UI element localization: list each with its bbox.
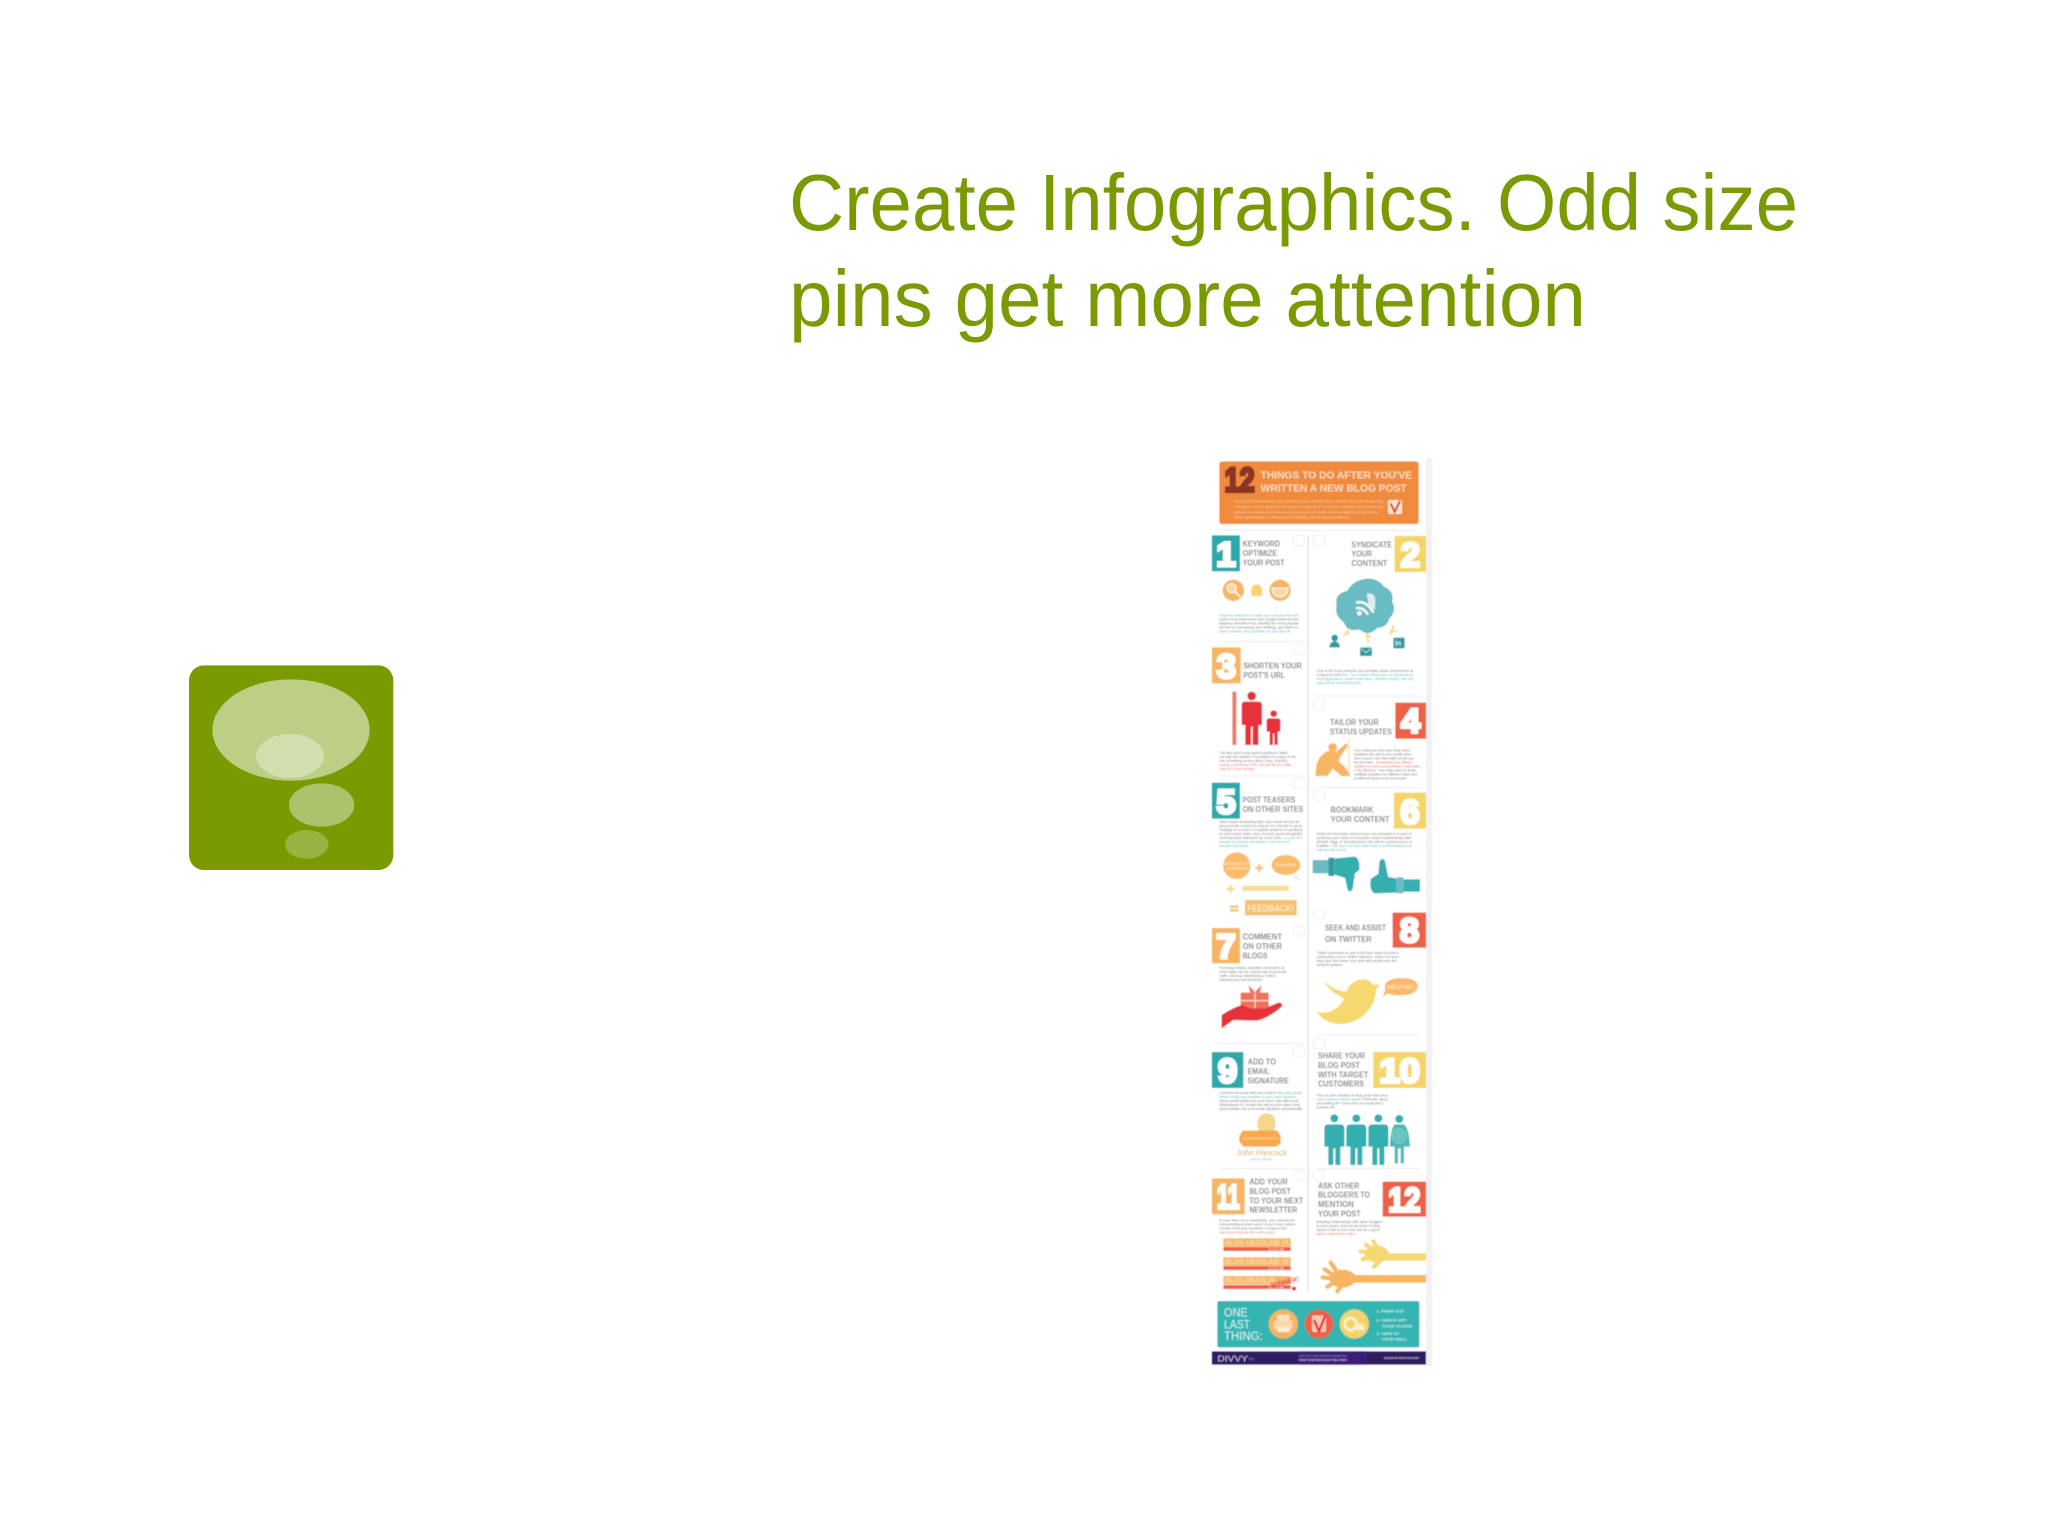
step 4: multiple updates for different days and: [1354, 772, 1417, 776]
icon: printer: [1269, 1309, 1298, 1339]
step 8: ON TWITTER: [1325, 935, 1372, 944]
diagram: teaser formula: THOUGHT: [1275, 863, 1297, 868]
step 7: 7: [1216, 928, 1236, 966]
step 9: ADD TO: [1248, 1058, 1276, 1067]
step 4: updates for each social network could make: [1354, 764, 1420, 768]
step 5: people to provide feedback in the form of: [1219, 840, 1290, 844]
step 10: BLOG POST: [1318, 1061, 1360, 1070]
step 11: 11: [1217, 1179, 1240, 1217]
illustration: newsletter headlines: BLOG HEADLINE #2: [1225, 1259, 1289, 1266]
step 9: 9: [1218, 1053, 1237, 1091]
step 12: [1314, 1171, 1426, 1291]
step 2: SYNDICATE: [1351, 540, 1393, 549]
step 9: Many email platforms now have http after post: [1219, 1099, 1300, 1103]
step 4: headline into all of your social sites: [1354, 752, 1411, 756]
step 6: pushing your content to popular social bookmarking sites: [1317, 836, 1412, 840]
step 2: feed. The content allows you to syndicate to: [1341, 673, 1413, 677]
step 8: community of your Twitter followers. Search for your: [1317, 955, 1399, 959]
step 12: way to extend your reach.: [1317, 1232, 1357, 1236]
panel: steps 3 to 6: having a shortened URL can see all your stats: [1219, 763, 1291, 767]
step 10: current customers will find valuable.: [1317, 1098, 1362, 1102]
step 10: What are: [1363, 1098, 1388, 1102]
step 5: 5: [1216, 783, 1236, 821]
header banner: Your post is published, and you think your work is done. But it's only just beginning,: [1234, 500, 1384, 504]
step 10: 10: [1379, 1053, 1420, 1091]
step 7: ON OTHER: [1243, 942, 1282, 951]
diagram: teaser formula: INTERESTING: [1223, 861, 1250, 866]
step 4: STATUS UPDATES: [1330, 727, 1393, 736]
step 10: WITH TARGET: [1318, 1070, 1368, 1079]
step 1: [1212, 535, 1305, 633]
step 6: [1313, 790, 1426, 893]
step 7: other blogs can be a great way to generate: [1219, 970, 1287, 974]
illustration: crouching figure: [1315, 738, 1351, 776]
step 8: asking for guidance.: [1317, 963, 1343, 967]
diagram: teaser formula: FEEDBACK!: [1247, 903, 1294, 913]
infographic: 12 things to do after writing a blog post: [1212, 458, 1432, 1366]
step 11: use your blog as the next point.: [1219, 1230, 1275, 1234]
step 8: blog topic and share your post with people who are: [1317, 959, 1397, 963]
step 5: Postings on a niche or a targeted audience or questions: [1219, 828, 1303, 832]
illustration: newsletter headlines: [1223, 1238, 1300, 1291]
step 7: BLOGS: [1243, 951, 1268, 960]
illustration: stamp and signature: [1235, 1113, 1288, 1162]
step 8: Twitter promotion is one of the best ways to build a: [1317, 951, 1399, 955]
step 1: keyword selection tool, identify the most popular: [1219, 621, 1299, 625]
illustration: twitter bird with speech bubble: HELP ME!: [1387, 985, 1414, 991]
step 3 heading: POST'S URL: [1243, 671, 1285, 680]
step 1: Keyword research is crucial, you must put the main: [1219, 613, 1299, 617]
step 11: If your time on a newsletter, you should be: [1219, 1218, 1295, 1222]
step 12: 12: [1388, 1181, 1420, 1219]
step 4: the most clicks.: [1354, 760, 1374, 764]
title: [789, 158, 1798, 343]
step 5: you promote content so long as it is relevant or good.: [1219, 824, 1303, 828]
step 12: ASK OTHER: [1318, 1181, 1360, 1190]
panel: steps 3 to 6: URL shortening services (Bit.ly, Ow.ly, TinyURL),: [1219, 759, 1289, 763]
illustration: gift in hand: [1222, 987, 1282, 1028]
step 11: BLOG POST: [1249, 1187, 1291, 1196]
step 11: NEWSLETTER: [1249, 1206, 1298, 1215]
step 6: make them like you too.: [1317, 848, 1347, 852]
step 9: post headline into your email signature automatically.: [1219, 1107, 1303, 1111]
step 6: YOUR CONTENT: [1331, 815, 1389, 824]
icon: checkmark: [1305, 1310, 1333, 1338]
header banner: WRITTEN A NEW BLOG POST: [1261, 484, 1407, 495]
illustration: newsletter headlines: BLOG HEADLIN: [1225, 1278, 1275, 1285]
step 2: apps using something else.: [1317, 681, 1362, 685]
step 1: YOUR POST: [1243, 558, 1285, 567]
step 5: ON OTHER SITES: [1243, 805, 1304, 814]
panel: one last thing: 3. TAPE TO: [1377, 1331, 1399, 1336]
step 2: feed aggregators, social media sites, LinkedIn Groups, and any: [1317, 677, 1413, 681]
step 8 number box top: [1393, 913, 1426, 936]
step 12: BLOGGERS TO: [1318, 1191, 1370, 1200]
title: Create Infographics. Odd size: [789, 158, 1798, 247]
step 9: SIGNATURE: [1248, 1076, 1290, 1085]
diagram: teaser formula: QUESTION: [1226, 866, 1247, 871]
step 7: Pursuing helpful, valuable comments on: [1219, 966, 1285, 970]
panel: one last thing: 1. PRINT OUT: [1377, 1309, 1405, 1314]
step 5: commentary followed by your URL.: [1219, 836, 1283, 840]
step 5: Look for: [1283, 836, 1304, 840]
step 1: KEYWORD: [1243, 540, 1280, 549]
icon: tape: [1340, 1309, 1369, 1339]
panel: header and steps 1 to 3: [1212, 461, 1426, 686]
step 12: about or link to your post can be a good: [1317, 1228, 1379, 1232]
step 8 heading top: SEEK AND ASSIST: [1325, 923, 1386, 932]
icon: thought bubble: [189, 665, 393, 870]
panel: steps 3 to 6: [1212, 692, 1426, 936]
step 2: YOUR: [1351, 550, 1372, 559]
step 1: OPTIMIZE: [1243, 549, 1278, 558]
step 8: [1317, 912, 1426, 1024]
step 5: Most social networking sites and online forums let: [1219, 820, 1300, 824]
step 12: Building relationships with other bloggers: [1317, 1220, 1383, 1224]
step 5: to your forum links, then include some thoughtful: [1219, 832, 1303, 836]
illustration: newsletter headlines: CLICK ME: [1268, 1285, 1285, 1289]
footer bar: DIVVYHQ IS YOUR CONTENT PLANNING TOOL: [1299, 1355, 1348, 1358]
illustration: newsletter headlines: CLICK ME: [1268, 1266, 1285, 1270]
step 11: incorporating at least some of your blog content.: [1219, 1222, 1296, 1226]
panel: one last thing: 2. CHECK OFF: [1377, 1318, 1407, 1323]
step 5: [1212, 779, 1304, 915]
step 6: traffic.: [1317, 844, 1331, 848]
step 9: feature along your headline to your email signature.: [1219, 1095, 1297, 1099]
step 4: a big difference.: [1354, 768, 1377, 772]
illustration: ruler and people: [1232, 692, 1280, 745]
panel: steps 3 to 6: but with the addition of analytics on many of the: [1219, 755, 1296, 759]
step 6: While the technique doesn't have the transparent it used to: [1317, 832, 1412, 836]
step 11: TO YOUR NEXT: [1249, 1196, 1303, 1205]
step 11: Include a few post headlines or teasers and: [1219, 1226, 1287, 1230]
step 6: (Reddit, Digg, or StumbleUpon) can still be a great source of: [1317, 840, 1413, 844]
step 6: 6: [1400, 793, 1420, 831]
step 9: EMAIL: [1248, 1067, 1270, 1076]
step 1: terms for phrasing and writing, go back to: [1219, 625, 1298, 629]
step 10: [1314, 1038, 1426, 1165]
panel: steps 11, 12 and closing: [1212, 1171, 1426, 1365]
step 2: [1314, 535, 1426, 685]
step 2: 2: [1401, 537, 1420, 575]
step 10: CUSTOMERS: [1318, 1080, 1365, 1089]
step 4: at different times to be successful.: [1354, 776, 1407, 780]
step 7: [1212, 927, 1304, 1028]
illustration: thumbs down and up: [1313, 858, 1420, 893]
step 3 heading: 3: [1217, 648, 1236, 686]
step 4: and a dozen, and that might not get you: [1354, 756, 1414, 760]
illustration: newsletter headlines: CLICK ME: [1268, 1247, 1285, 1251]
step 4: 4: [1401, 703, 1421, 741]
step 11: [1212, 1171, 1304, 1291]
panel: one last thing: ONE: [1224, 1306, 1248, 1320]
panel: steps 3 to 6: This step used to only apply to posting on Twitter,: [1219, 751, 1289, 755]
step 9: [1212, 1046, 1304, 1162]
footer bar: HQ: [1249, 1357, 1254, 1361]
step 3 heading: [1212, 645, 1304, 686]
header banner: publish and make sure that every post gets the traffic and the attention it deserves,: [1234, 510, 1379, 514]
step 9: last post: [1283, 1091, 1303, 1095]
panel: steps 3 to 6: now at a mere bitmap.: [1219, 767, 1255, 771]
step 6: BOOKMARK: [1331, 806, 1374, 815]
header banner: a blog is only as good as the way you spread it. Use this checklist every time you: [1234, 505, 1384, 509]
header banner: 12: [1225, 462, 1255, 500]
step 10: You've just created a blog post that your: [1317, 1094, 1389, 1098]
step 4: You may want to write: [1379, 768, 1416, 772]
step 12: MENTION: [1318, 1200, 1354, 1209]
illustration: social cloud: [1329, 579, 1405, 656]
step 5: POST TEASERS: [1243, 796, 1296, 805]
step 8: 8: [1400, 912, 1419, 950]
footer bar: START YOUR FREE 30-DAY TRIAL TODAY: [1299, 1358, 1348, 1362]
step 5: relevant discussion.: [1219, 844, 1249, 848]
illustration: social cloud: in: [1395, 641, 1401, 648]
icons: search, bell, bowl: [1223, 580, 1291, 601]
step 4: TAILOR YOUR: [1330, 718, 1379, 727]
step 12: in your space and asking them to blog: [1317, 1224, 1380, 1228]
panel: one last thing: [1217, 1301, 1419, 1347]
step 4: Tweaking your status: [1375, 760, 1412, 764]
illustration: stamp and signature: John Hancock: [1235, 1148, 1288, 1157]
illustration: reaching hands: [1323, 1241, 1426, 1291]
step 2: a blog is its RSS: [1317, 673, 1340, 677]
step 7: traffic, develop relationships, build a: [1219, 974, 1277, 978]
panel: one last thing: LAST: [1224, 1317, 1250, 1331]
step 4: You could just post your blog post's: [1354, 748, 1411, 752]
footer bar: DESIGN BY BRAFTON.COM: [1384, 1356, 1419, 1360]
illustration: stamp and signature: DIVVY BLOG: [1251, 1158, 1273, 1162]
step 11: ADD YOUR: [1249, 1178, 1288, 1187]
step 12: YOUR POST: [1318, 1209, 1361, 1218]
step 1: 1: [1216, 536, 1236, 574]
header banner: [1219, 461, 1419, 524]
title: pins get more attention: [789, 254, 1586, 343]
step 9: (WiseStamp for Gmail) that will put your latest blog: [1219, 1103, 1300, 1107]
footer bar: DIVVY: [1217, 1354, 1249, 1364]
step 10: promotion CRO.: [1317, 1106, 1335, 1110]
step 7: COMMENT: [1243, 933, 1282, 942]
step 1: topics. Plug those terms into Google AdWords free: [1219, 617, 1299, 621]
panel: steps 7 to 10: [1212, 912, 1426, 1169]
step 2: One of the most powerful and versatile social mechanisms of: [1317, 669, 1414, 673]
step 9: Common personal links and email in the: [1219, 1091, 1283, 1095]
panel: one last thing: YOUR WALL: [1382, 1337, 1407, 1342]
step 10: you waiting for? Send them an email with a: [1317, 1102, 1384, 1106]
illustration: target customers: [1324, 1114, 1410, 1165]
step 10: SHARE YOUR: [1318, 1052, 1365, 1061]
panel: one last thing: YOUR TO-DOS: [1382, 1323, 1413, 1328]
step 1: your content, and sprinkle as you see fit.: [1219, 629, 1291, 633]
step 4: [1314, 699, 1426, 780]
illustration: newsletter headlines: WINNER!: [1270, 1276, 1300, 1290]
step 6: The key is to see what they're bookmarking and: [1331, 844, 1411, 848]
header banner: from optimizing to sharing to reaching out to your audience.: [1234, 516, 1351, 520]
panel: one last thing: THING:: [1224, 1329, 1263, 1343]
illustration: newsletter headlines: BLOG HEADLINE #1: [1225, 1240, 1289, 1247]
diagram: teaser formula: [1223, 852, 1300, 915]
header banner: THINGS TO DO AFTER YOU'VE: [1261, 471, 1412, 482]
footer bar: [1212, 1351, 1426, 1365]
step 3 heading: SHORTEN YOUR: [1243, 661, 1302, 670]
step 7: following and add backlinks.: [1219, 978, 1263, 982]
step 2: CONTENT: [1351, 559, 1387, 568]
